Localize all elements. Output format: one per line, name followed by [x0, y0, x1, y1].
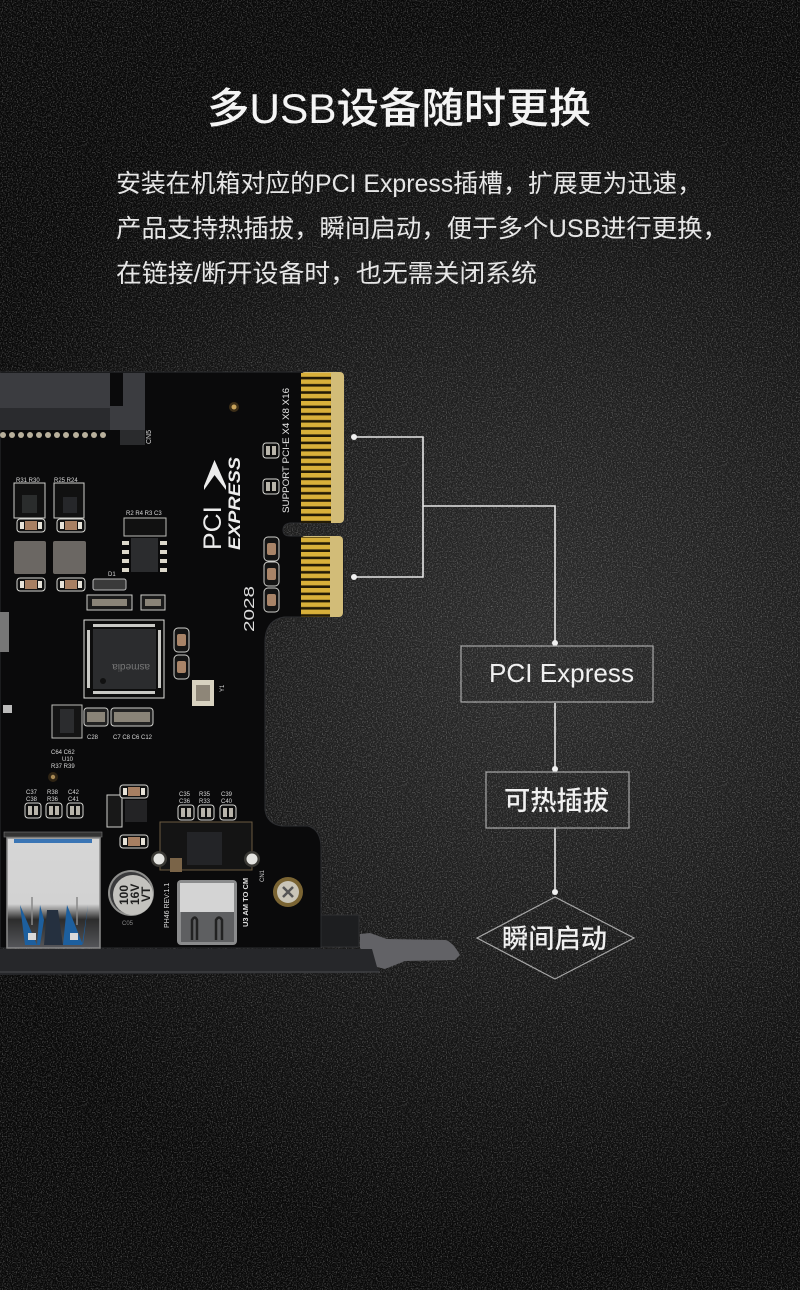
asmedia controller chip: asmedia: [112, 661, 150, 672]
silkscreen labels: R38: [47, 790, 59, 796]
silkscreen labels: C28: [87, 735, 99, 741]
label box: PCI Express: PCI Express: [489, 658, 634, 688]
silkscreen labels: C7 C8 C6 C12: [113, 735, 153, 741]
passive parts by controller: [174, 628, 226, 706]
mounting screw: CN1: [260, 869, 266, 882]
connector dots: [351, 434, 558, 895]
intro text block: 产品支持热插拔，瞬间启动，便于多个USB进行更换，: [116, 215, 728, 243]
gold hole: [229, 402, 239, 412]
silkscreen labels: R37 R39: [51, 764, 75, 770]
type-C daughter module: [151, 822, 260, 928]
gold test point: [48, 772, 58, 782]
silkscreen labels: R33: [199, 799, 211, 805]
silkscreen labels: R2 R4 R3 C3: [126, 511, 162, 517]
driver chip U2: [122, 518, 167, 572]
SATA connector: [0, 373, 153, 445]
passive parts by controller: Y1: [220, 684, 226, 692]
silkscreen labels: C41: [68, 797, 80, 803]
power regulators and inductors: [0, 483, 86, 652]
low dropout regulator: [107, 785, 148, 848]
USB-A port: [4, 832, 102, 948]
silkscreen labels: R36: [47, 797, 59, 803]
silkscreen labels: C35: [179, 792, 191, 798]
diode and resistor rows: [87, 579, 165, 610]
silkscreen labels: C42: [68, 790, 80, 796]
USB-C port: [177, 880, 237, 945]
mounting screw: [260, 869, 303, 907]
PCI Express logo: EXPRESS: [225, 456, 244, 550]
electrolytic capacitor: [108, 870, 154, 927]
metal bracket: [0, 915, 460, 975]
electrolytic capacitor: 100: [117, 885, 131, 905]
silkscreen labels: C40: [221, 799, 233, 805]
label box: PCI Express: [461, 646, 653, 702]
silkscreen labels: [16, 478, 233, 805]
electrolytic capacitor: C05: [122, 921, 134, 927]
silkscreen labels: R35: [199, 792, 211, 798]
gold finger long: [301, 372, 344, 523]
silkscreen labels: R25 R24: [54, 478, 78, 484]
connector lines: [354, 437, 555, 889]
electrolytic capacitor: 16V: [128, 884, 142, 905]
silkscreen support label: SUPPORT PCI-E X4 X8 X16: [281, 388, 291, 513]
PCIe expansion card: [0, 372, 460, 975]
intro text block: 在链接/断开设备时，也无需关闭系统: [116, 260, 537, 288]
intro text block: 安装在机箱对应的PCI Express插槽，扩展更为迅速，: [116, 170, 702, 198]
silkscreen labels: D1: [108, 572, 116, 578]
silkscreen labels: C37: [26, 790, 38, 796]
label diamond: instant start: 瞬间启动: [502, 924, 607, 954]
PCI Express logo: [199, 456, 244, 550]
intro text block: [116, 170, 728, 288]
title: 多USB设备随时更换: [207, 85, 591, 132]
silkscreen labels: C39: [221, 792, 233, 798]
electrolytic capacitor: VT: [139, 886, 153, 902]
type-C daughter module: PH46 REV:1.1: [164, 883, 171, 928]
asmedia controller chip: [84, 620, 164, 698]
silkscreen labels: R31 R30: [16, 478, 40, 484]
type-C daughter module: U3 AM TO CM: [241, 878, 250, 927]
label diamond: instant start: [477, 897, 634, 979]
pad rows: [25, 803, 236, 820]
gold finger short: [301, 536, 343, 617]
silkscreen labels: U10: [62, 757, 74, 763]
SATA connector: CN5: [146, 430, 153, 444]
label box: hot swap: 可热插拔: [504, 786, 609, 816]
label box: hot swap: [486, 772, 629, 828]
silkscreen labels: C38: [26, 797, 38, 803]
lower left components: [3, 705, 153, 738]
silkscreen labels: C36: [179, 799, 191, 805]
circuit board: [0, 372, 344, 948]
small pads near fingers: [263, 443, 279, 612]
board year mark: 2028: [241, 586, 258, 632]
silkscreen labels: C64 C62: [51, 750, 75, 756]
PCI Express logo: PCI: [199, 506, 227, 550]
